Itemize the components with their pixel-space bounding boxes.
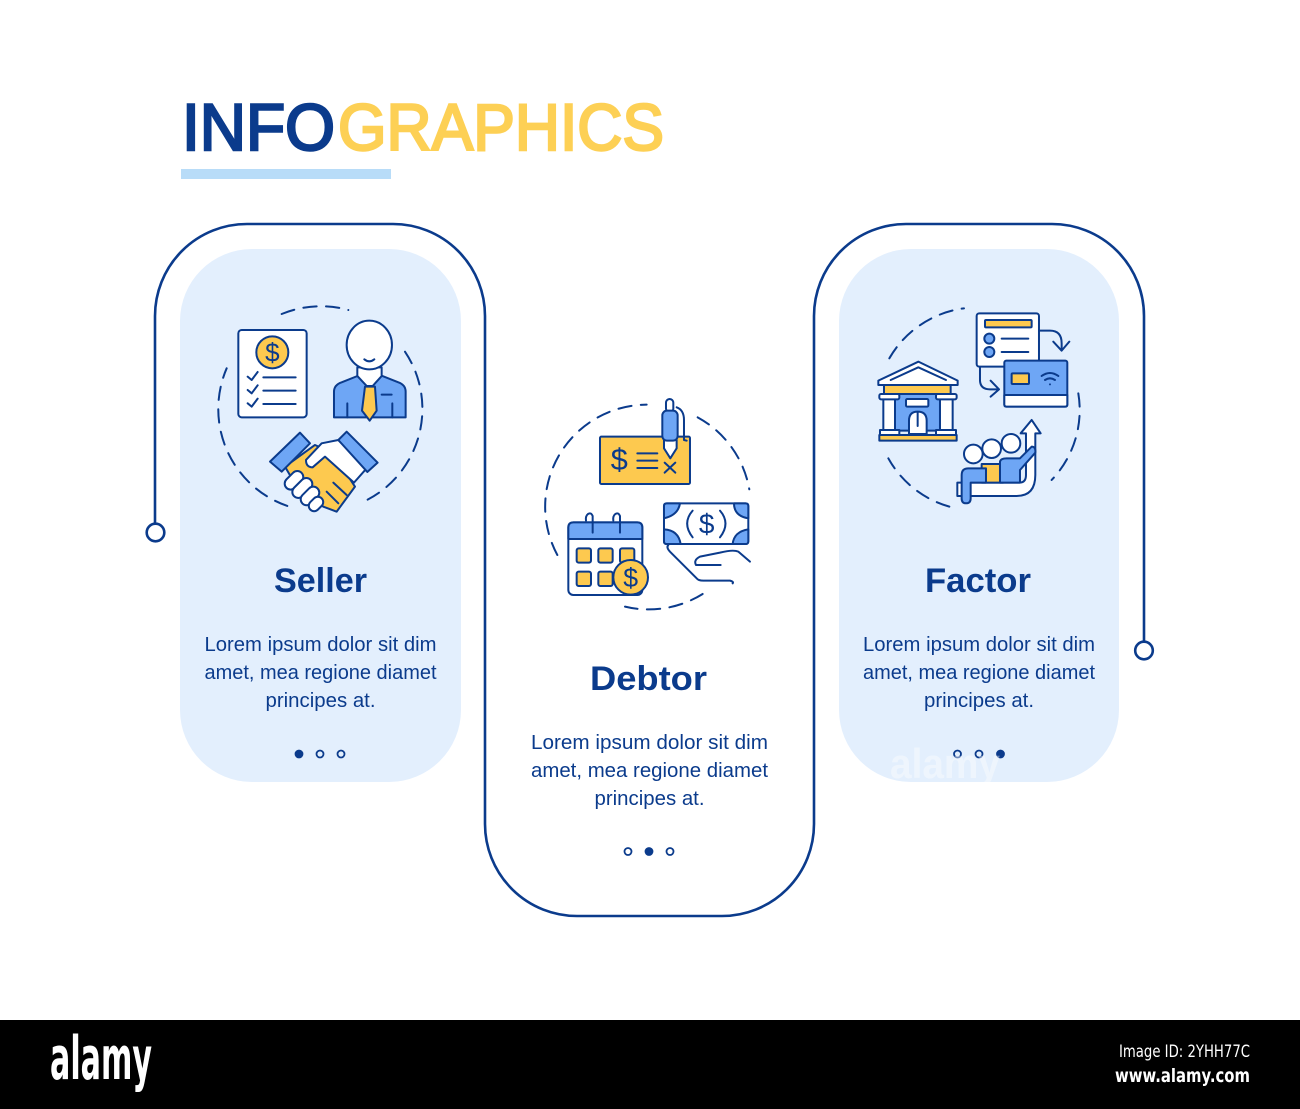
text block: debtor: [531, 731, 768, 810]
heading: debtor: Debtor: [590, 660, 707, 698]
document to card flow: [977, 313, 1069, 407]
group with growth arrow: [957, 420, 1041, 503]
text block: seller: Lorem ipsum dolor sit dim: [204, 633, 436, 656]
image id: Image ID: 2YHH77C: [1119, 1042, 1250, 1062]
heading: factor: Factor: [925, 562, 1031, 600]
panel background: seller: [180, 249, 461, 782]
pagination dots: factor: [954, 750, 1004, 758]
icon: factor finance: [878, 308, 1080, 507]
title: GRAPHICS: [338, 90, 664, 164]
calendar with coin: [568, 513, 648, 595]
text block: seller: [204, 633, 437, 712]
handshake: [270, 432, 378, 513]
calendar with coin: $: [623, 563, 638, 593]
businessperson: [334, 321, 406, 421]
footer bar: [0, 1020, 1300, 1109]
text block: seller: principes at.: [266, 689, 376, 712]
text block: factor: [863, 633, 1095, 712]
text block: factor: principes at.: [924, 689, 1034, 712]
icon: seller agreement: [218, 306, 422, 513]
text block: factor: amet, mea regione diamet: [863, 661, 1095, 684]
text block: debtor: amet, mea regione diamet: [531, 759, 768, 782]
banknote in hand: $: [699, 508, 715, 539]
panel background: factor: [839, 249, 1119, 782]
icon: debtor payments: [545, 399, 750, 609]
connecting outline frame: [147, 224, 1153, 916]
banknote in hand: [664, 503, 750, 583]
title underline: [181, 169, 391, 179]
text block: debtor: Lorem ipsum dolor sit dim: [531, 731, 768, 754]
text block: debtor: principes at.: [594, 787, 704, 810]
heading: seller: Seller: [274, 562, 367, 600]
title: INFO: [182, 90, 335, 164]
invoice document: [238, 330, 307, 417]
website: www.alamy.com: [1115, 1065, 1250, 1087]
signed cheque: [600, 399, 690, 484]
pagination dots: debtor: [624, 848, 674, 855]
pagination dots: seller: [296, 750, 344, 758]
text block: seller: amet, mea regione diamet: [204, 661, 437, 684]
invoice document: $: [265, 338, 280, 368]
title: [182, 90, 664, 164]
footer logo: alamy: [50, 1024, 152, 1094]
bank building: [878, 362, 958, 441]
watermark: alamy: [890, 740, 1001, 787]
signed cheque: $: [611, 443, 628, 477]
text block: factor: Lorem ipsum dolor sit dim: [863, 633, 1095, 656]
